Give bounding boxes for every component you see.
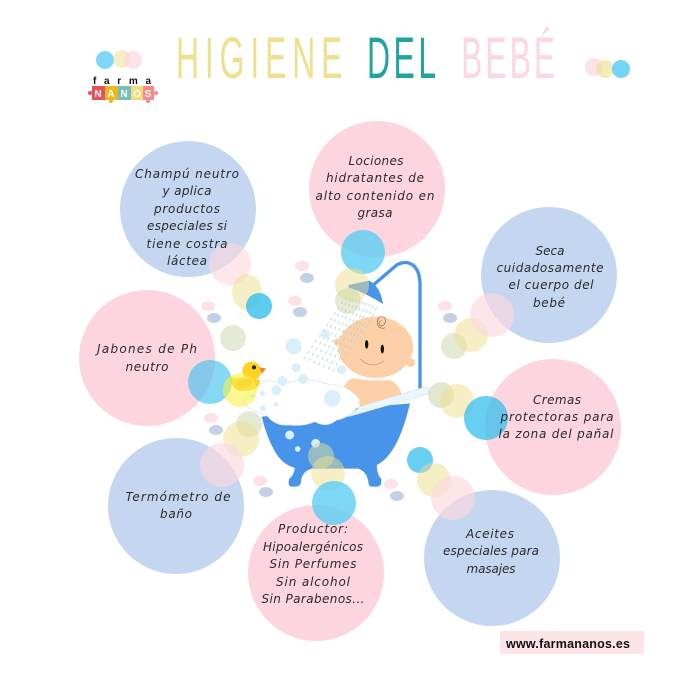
logo: farma nanos: A — [107, 89, 115, 100]
logo: farma nanos: S — [145, 89, 152, 100]
logo: farma nanos: O — [133, 89, 141, 100]
logo: farma nanos — [88, 50, 158, 103]
rubber duck — [229, 362, 266, 391]
text: champú: especiales si — [147, 219, 228, 233]
title: HIGIENE — [176, 26, 348, 90]
text: cremas: la zona del pañal — [498, 427, 614, 441]
floating bubbles: right of tub — [428, 382, 508, 440]
panel: termómetro circle — [108, 438, 244, 574]
panel: champú circle — [120, 141, 256, 277]
text: productor: Hipoalergénicos — [263, 540, 363, 554]
text: seca: Seca — [536, 244, 564, 258]
text: cremas: protectoras para — [500, 410, 614, 424]
floating bubbles: lower right — [407, 447, 475, 520]
text: lociones: Lociones — [348, 154, 404, 168]
text: lociones: alto contenido en — [316, 189, 434, 203]
text: termómetro: Termómetro de — [126, 490, 230, 504]
title: DEL — [367, 26, 440, 90]
text: productor — [262, 522, 364, 606]
text: lociones — [316, 154, 434, 220]
decorative bubbles: top right — [585, 58, 630, 78]
floating bubbles: left by duck — [188, 360, 257, 407]
text: productor: Sin alcohol — [276, 575, 351, 589]
baby body — [344, 379, 402, 407]
website link box: www.farmananos.es — [505, 637, 630, 651]
text: jabones: neutro — [126, 360, 168, 374]
text: jabones — [95, 342, 197, 374]
text: aceites: Aceites — [465, 527, 514, 541]
logo: farma nanos: N — [94, 89, 102, 100]
shower arm — [373, 262, 420, 388]
logo: farma nanos: N — [120, 89, 128, 100]
small bubbles — [251, 330, 346, 452]
text: aceites: masajes — [466, 562, 516, 576]
text: champú: tiene costra — [146, 237, 228, 251]
title — [176, 26, 558, 90]
panel: jabones circle — [79, 290, 215, 426]
panel: seca circle — [481, 207, 617, 343]
floating bubbles: bottom centre — [308, 443, 404, 525]
panel: lociones circle — [309, 121, 445, 257]
text: productor: Sin Parabenos... — [262, 592, 364, 606]
text: seca — [496, 244, 604, 310]
text: champú: Champú neutro — [135, 167, 239, 181]
floating bubbles: top centre — [288, 230, 385, 317]
illustration: baby in bathtub — [229, 262, 430, 487]
text: champú — [135, 167, 239, 268]
text: champú: y aplica — [162, 184, 212, 198]
text: seca: bebé — [533, 296, 565, 310]
text: aceites — [443, 527, 539, 576]
bath rim — [348, 387, 430, 417]
logo: farma nanos: farma — [93, 76, 151, 87]
panel: productor circle — [248, 505, 384, 641]
floating bubbles: upper left — [201, 243, 272, 351]
website link box — [500, 631, 644, 654]
text: termómetro: baño — [160, 507, 192, 521]
text: seca: cuidadosamente — [496, 261, 604, 275]
text: champú: láctea — [167, 254, 207, 268]
text: cremas: Cremas — [533, 393, 581, 407]
text: cremas — [498, 393, 614, 441]
text: productor: Sin Perfumes — [270, 557, 356, 571]
water spray — [303, 296, 377, 373]
text: lociones: grasa — [358, 206, 392, 220]
text: productor: Productor: — [278, 522, 348, 536]
text: aceites: especiales para — [443, 544, 539, 558]
text: termómetro — [126, 490, 230, 521]
floating bubbles: upper right — [438, 293, 514, 359]
foam — [243, 380, 360, 425]
title: BEBÉ — [461, 26, 558, 90]
baby head — [334, 317, 415, 378]
shower head — [348, 281, 383, 304]
bathtub — [262, 403, 410, 487]
text: seca: el cuerpo del — [508, 278, 594, 292]
panel: aceites circle — [424, 490, 560, 626]
floating bubbles: lower left — [200, 411, 273, 497]
text: jabones: Jabones de Ph — [95, 342, 197, 356]
text: lociones: hidratantes de — [326, 171, 424, 185]
panel: cremas circle — [485, 359, 621, 495]
text: champú: productos — [153, 202, 220, 216]
